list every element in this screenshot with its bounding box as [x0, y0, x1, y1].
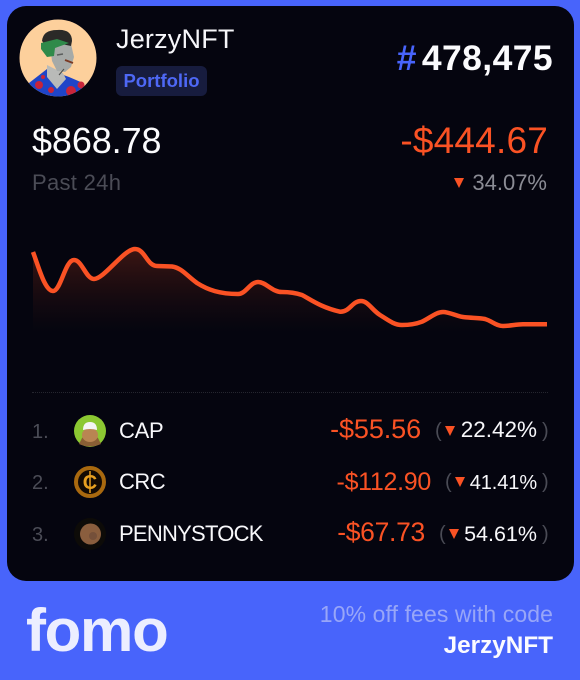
change percent: 34.07% [472, 170, 547, 195]
row: PENNYSTOCK: 54.61% [464, 522, 537, 546]
icon: CRC token: C [83, 472, 97, 494]
change amount: -$444.67 [400, 120, 548, 161]
row: CAP: ) [542, 420, 549, 442]
row: CRC: ) [542, 471, 549, 493]
portfolio value: $868.78 [32, 120, 161, 160]
label: past 24h: Past 24h [32, 170, 121, 195]
row: PENNYSTOCK: 3. [32, 524, 49, 546]
badge: Portfolio [116, 66, 207, 96]
row: CRC: 41.41% [470, 472, 537, 494]
row: CRC: 2. [32, 472, 49, 494]
icon: CRC token [74, 466, 106, 498]
dotted divider [32, 392, 548, 393]
promo code: JerzyNFT [444, 632, 553, 659]
row: CRC: ( [445, 471, 452, 493]
row: PENNYSTOCK: ) [542, 523, 549, 545]
rank: #478,475 [397, 38, 553, 78]
row: PENNYSTOCK: -$67.73 [337, 517, 425, 547]
row: PENNYSTOCK: ( [439, 523, 446, 545]
row: CAP: CAP [119, 418, 163, 442]
promo text: 10% off fees with code [320, 601, 553, 627]
badge: Portfolio: Portfolio [123, 70, 200, 91]
row: CAP: 22.42% [461, 417, 537, 442]
area line chart [30, 246, 547, 328]
row: CAP [32, 414, 549, 447]
row: PENNYSTOCK [32, 517, 549, 547]
row: CAP: -$55.56 [330, 414, 421, 444]
row: CRC: CRC [119, 469, 165, 494]
logo: fomo: fomo [26, 597, 167, 664]
username: JerzyNFT [116, 24, 235, 54]
row: CAP: 1. [32, 420, 49, 442]
icon: PENNYSTOCK token [80, 524, 101, 544]
row: PENNYSTOCK: PENNYSTOCK [119, 521, 263, 546]
row: CRC: -$112.90 [337, 468, 431, 496]
row: CRC [32, 466, 549, 498]
row: CAP: ( [435, 420, 442, 442]
icon: avatar [20, 20, 96, 96]
icon: CAP token [74, 415, 106, 447]
